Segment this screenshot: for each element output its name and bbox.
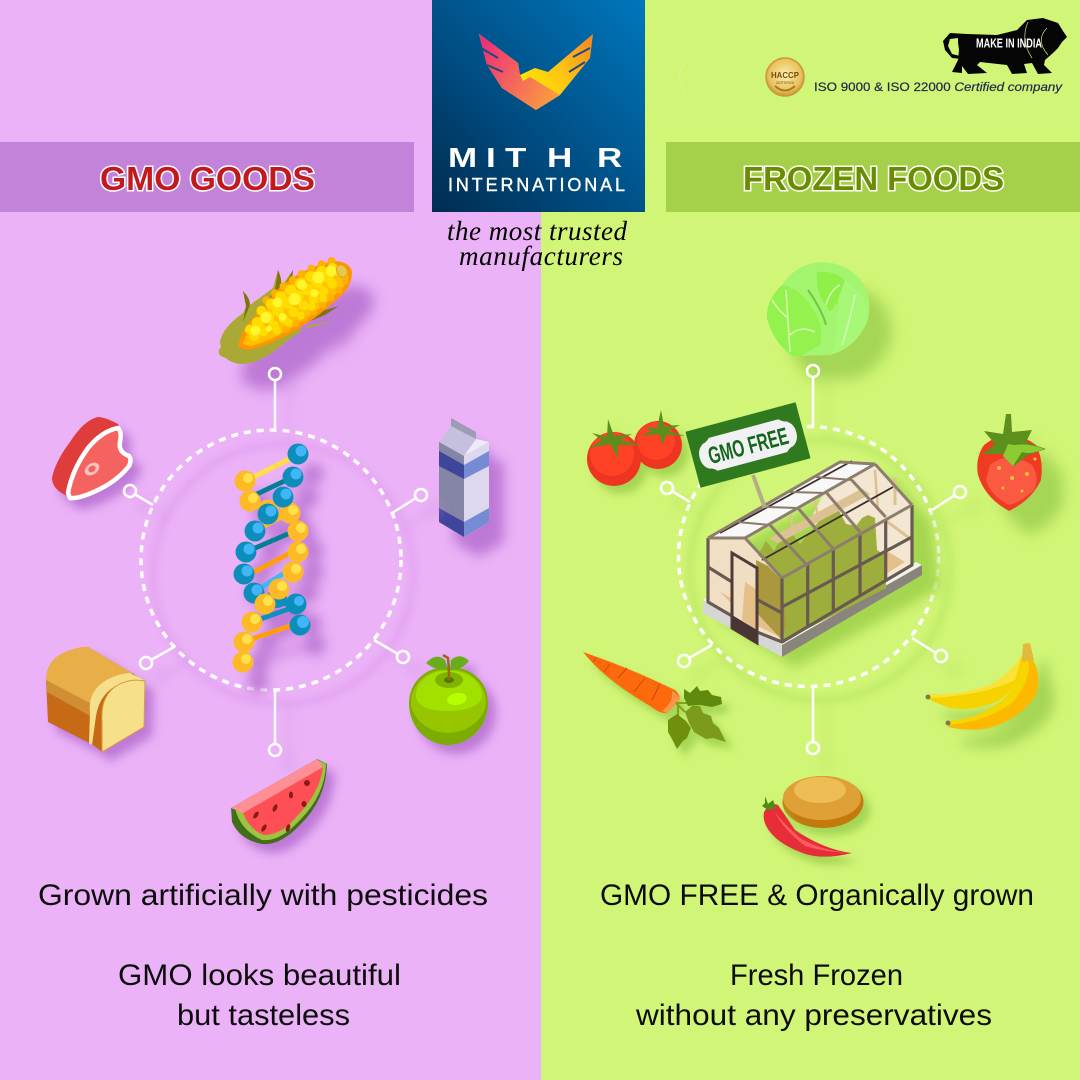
icon: winged emblem bbox=[479, 34, 593, 110]
text block: frozen foods claims: without any preservatives bbox=[635, 999, 992, 1032]
diagram ring: GMO goods bbox=[141, 430, 413, 704]
icon: strawberry bbox=[977, 414, 1046, 511]
icon: carrot bbox=[583, 652, 726, 749]
icon: tomatoes bbox=[587, 410, 685, 486]
sign post bbox=[753, 475, 765, 508]
heading: GMO goods text: GMO GOODS bbox=[100, 160, 315, 197]
icon: meat steak bbox=[52, 417, 130, 498]
text block: frozen foods claims bbox=[600, 879, 1034, 1032]
text block: frozen foods claims: GMO FREE & Organically grown bbox=[600, 879, 1034, 912]
icon: watermelon slice bbox=[231, 759, 327, 844]
icon: Make in India lion: MAKE IN INDIA bbox=[976, 36, 1042, 50]
connectors: GMO goods bbox=[124, 368, 427, 756]
icon: corn bbox=[219, 250, 356, 364]
panel: frozen foods background bbox=[541, 0, 1080, 1080]
text block: GMO goods claims: Grown artificially with pesticides bbox=[38, 879, 488, 912]
heading band: GMO goods bbox=[0, 142, 414, 212]
sign: GMO FREE bbox=[685, 402, 811, 488]
icon: chili pepper bbox=[762, 796, 852, 857]
text block: GMO goods claims: but tasteless bbox=[177, 999, 350, 1032]
faint seal bbox=[679, 62, 686, 92]
diagram ring: frozen foods bbox=[678, 426, 950, 700]
heading band: frozen foods bbox=[666, 142, 1080, 212]
icon: bread loaf bbox=[46, 647, 145, 752]
icon: milk carton bbox=[439, 418, 489, 537]
icon: cabbage bbox=[767, 262, 870, 356]
sign: GMO FREE: GMO FREE bbox=[705, 423, 791, 470]
greenhouse roof bbox=[708, 461, 912, 578]
text block: frozen foods claims: Fresh Frozen bbox=[730, 959, 903, 992]
heading: frozen foods text: FROZEN FOODS bbox=[743, 160, 1004, 197]
icon: DNA helix bbox=[232, 444, 310, 672]
greenhouse bbox=[703, 461, 940, 668]
icon: Make in India lion bbox=[943, 18, 1067, 74]
certification: HACCP badge: HACCP bbox=[771, 70, 799, 80]
icon: green apple bbox=[409, 655, 488, 745]
logo: Mithr International bbox=[432, 0, 645, 212]
greenhouse frame bbox=[708, 505, 912, 642]
icon: bananas bbox=[926, 643, 1038, 730]
tagline bbox=[447, 216, 628, 271]
logo wordmark: International: INTERNATIONAL bbox=[448, 175, 625, 195]
certification: HACCP badge bbox=[766, 58, 804, 96]
panel: GMO goods background bbox=[0, 0, 541, 1080]
greenhouse door bbox=[732, 553, 757, 643]
greenhouse base bbox=[703, 562, 922, 657]
greenhouse walls and plants bbox=[708, 462, 912, 642]
connectors: frozen foods bbox=[661, 365, 966, 754]
text block: GMO goods claims bbox=[38, 879, 488, 1032]
icon: potato bbox=[782, 776, 864, 828]
certification: HACCP badge: CERTIFIED bbox=[776, 81, 795, 85]
text block: GMO goods claims: GMO looks beautiful bbox=[118, 959, 401, 992]
tagline: the most trusted bbox=[447, 216, 628, 246]
logo wordmark: MITHR: MITHR bbox=[448, 141, 622, 173]
certification: ISO text: ISO 9000 & ISO 22000 Certified company bbox=[814, 82, 1063, 94]
tagline: manufacturers bbox=[459, 241, 623, 271]
